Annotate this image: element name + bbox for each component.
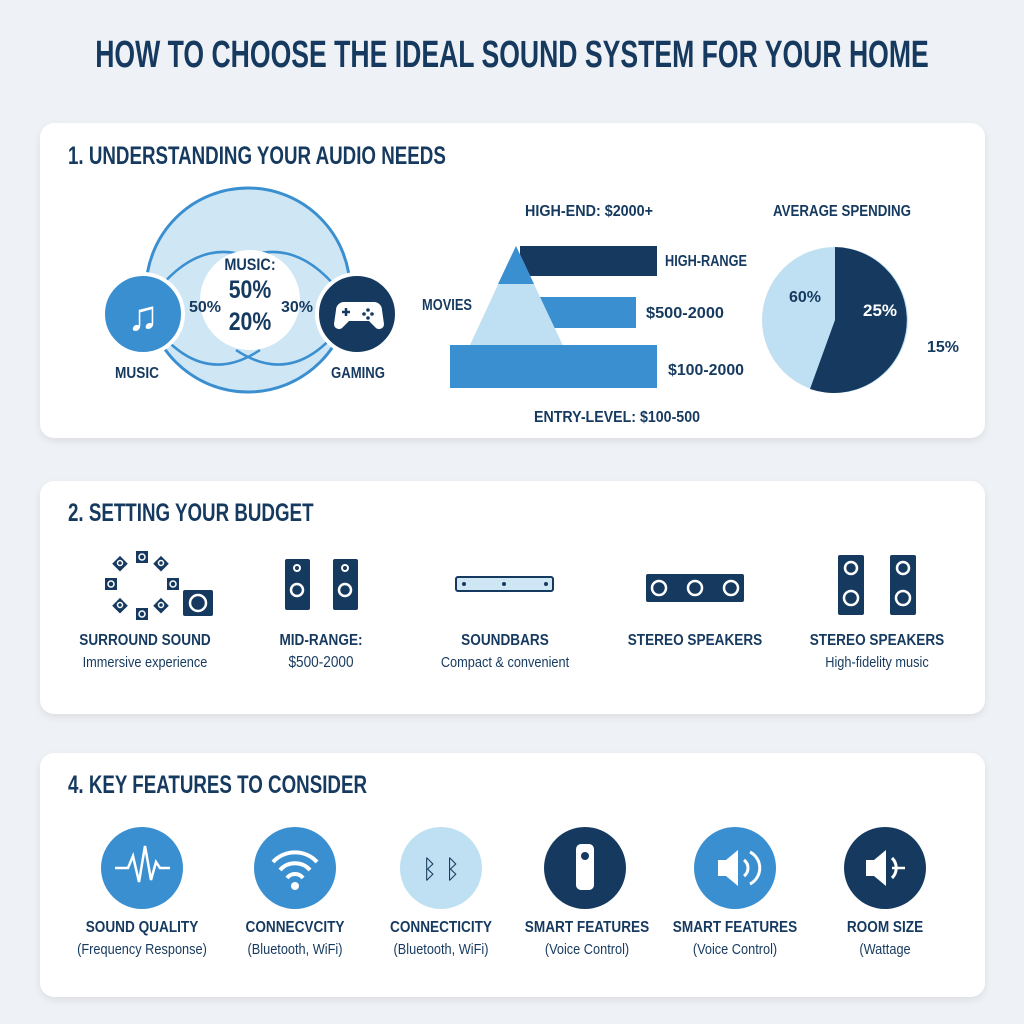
pie chart: 15% (927, 339, 959, 356)
panel: budget (40, 481, 985, 714)
pyramid chart: ENTRY-LEVEL: $100-500 (534, 409, 700, 426)
panel: budget: $500-2000 (288, 654, 354, 671)
feature icons (101, 827, 926, 909)
panel: budget: Compact & convenient (441, 654, 569, 671)
venn diagram (105, 186, 395, 394)
venn diagram: ♫ (127, 292, 159, 339)
heading: 1. UNDERSTANDING YOUR AUDIO NEEDS (68, 142, 446, 170)
panel: key features (40, 753, 985, 997)
panel: key features: (Voice Control) (693, 941, 777, 958)
pyramid chart: MOVIES (422, 297, 472, 314)
panel: audio needs (40, 123, 985, 438)
item labels: SURROUND SOUND (79, 632, 211, 649)
heading: 4. KEY FEATURES TO CONSIDER (68, 771, 367, 799)
pie chart (762, 203, 959, 393)
feature labels: (Frequency Response) (77, 941, 207, 958)
venn diagram: 50% (229, 275, 271, 303)
panel: budget: High-fidelity music (825, 654, 929, 671)
pyramid chart (422, 203, 747, 426)
venn diagram: 20% (229, 307, 271, 335)
pyramid chart: HIGH-END: $2000+ (525, 203, 653, 220)
panel: budget: MID-RANGE: (279, 632, 363, 649)
venn diagram: GAMING (331, 365, 385, 382)
panel: budget: SOUNDBARS (461, 632, 549, 649)
pie chart: 60% (789, 289, 821, 306)
pie chart: AVERAGE SPENDING (773, 203, 911, 220)
venn diagram: 30% (281, 299, 313, 316)
item labels: Immersive experience (83, 654, 207, 671)
panel: key features: (Bluetooth, WiFi) (248, 941, 342, 958)
pyramid chart: HIGH-RANGE (665, 253, 747, 270)
panel: key features: SMART FEATURES (673, 919, 797, 936)
panel: key features: CONNECTICITY (390, 919, 492, 936)
pyramid chart: $100-2000 (668, 362, 744, 379)
pyramid chart: $500-2000 (646, 305, 724, 322)
feature labels: SOUND QUALITY (86, 919, 198, 936)
venn diagram: MUSIC (115, 365, 159, 382)
title: HOW TO CHOOSE THE IDEAL SOUND SYSTEM FOR YOUR HOME (95, 34, 929, 76)
panel: budget: STEREO SPEAKERS (810, 632, 944, 649)
panel: key features: (Voice Control) (545, 941, 629, 958)
panel: key features: (Wattage (859, 941, 911, 958)
panel: key features: CONNECVCITY (246, 919, 344, 936)
panel: budget: STEREO SPEAKERS (628, 632, 762, 649)
venn diagram: 50% (189, 299, 221, 316)
item labels (79, 632, 211, 671)
feature icons: ᛒ ᛒ (422, 854, 460, 884)
pie chart: 25% (863, 301, 897, 320)
panel: key features: (Bluetooth, WiFi) (394, 941, 488, 958)
heading: 2. SETTING YOUR BUDGET (68, 499, 314, 527)
venn diagram: MUSIC: (224, 256, 276, 274)
icons row (105, 551, 916, 620)
panel: key features: ROOM SIZE (847, 919, 923, 936)
panel: key features: SMART FEATURES (525, 919, 649, 936)
feature labels (77, 919, 207, 958)
